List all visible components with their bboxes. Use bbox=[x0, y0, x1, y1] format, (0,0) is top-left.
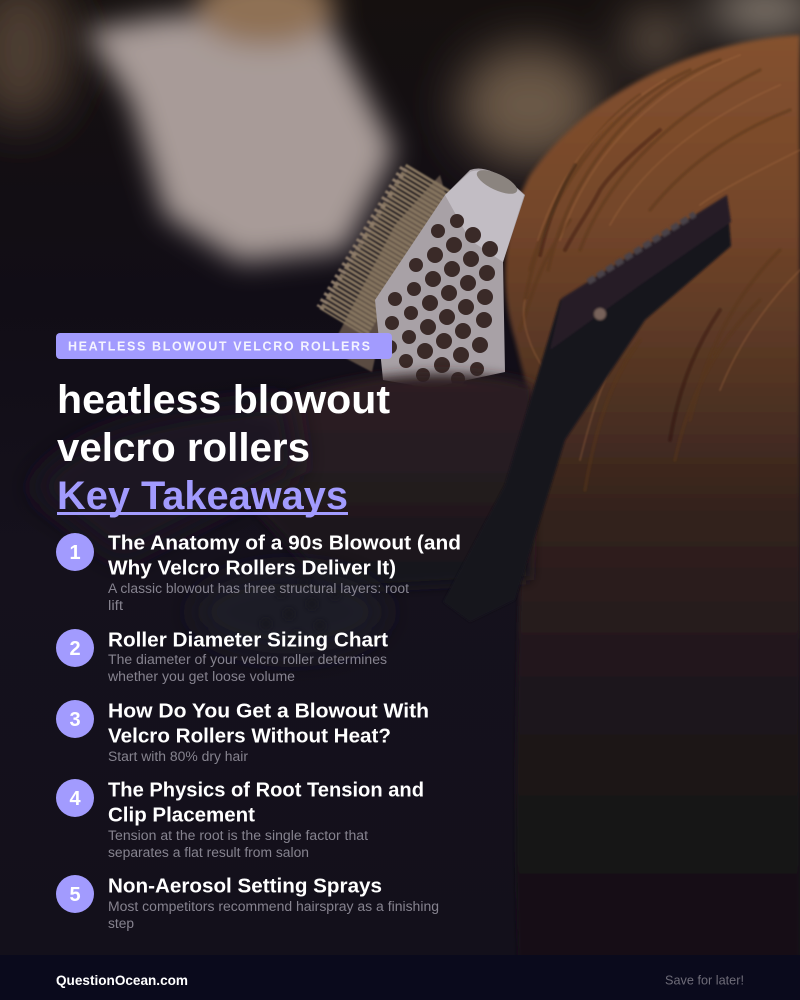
footer bar bbox=[0, 955, 800, 1000]
title: heatless blowout bbox=[57, 378, 390, 422]
takeaway 5 bbox=[56, 875, 439, 931]
takeaway 4: The Physics of Root Tension and bbox=[108, 780, 424, 802]
takeaway 1: A classic blowout has three structural layers: root bbox=[108, 581, 409, 596]
title: velcro rollers bbox=[57, 426, 310, 470]
title bbox=[57, 378, 390, 518]
black hair clip bbox=[443, 195, 731, 622]
takeaway 1: The Anatomy of a 90s Blowout (and bbox=[108, 532, 461, 554]
takeaway 3: Velcro Rollers Without Heat? bbox=[108, 726, 391, 748]
hair on the right bbox=[505, 35, 800, 1000]
tag pill: HEATLESS BLOWOUT VELCRO ROLLERS bbox=[68, 340, 370, 354]
takeaway 3: How Do You Get a Blowout With bbox=[108, 700, 429, 722]
takeaway 5: Most competitors recommend hairspray as a finishing bbox=[108, 899, 439, 914]
brush barrel with perforations bbox=[375, 165, 525, 388]
takeaway 4: 4 bbox=[69, 788, 81, 810]
footer bar: Save for later! bbox=[665, 974, 744, 988]
takeaway 1: Why Velcro Rollers Deliver It) bbox=[108, 558, 396, 580]
takeaway 4 bbox=[56, 779, 424, 860]
blurred white figure bbox=[85, 0, 395, 262]
takeaway 2: The diameter of your velcro roller determines bbox=[108, 652, 387, 667]
takeaway 5: Non-Aerosol Setting Sprays bbox=[108, 876, 382, 898]
takeaway 4: Clip Placement bbox=[108, 804, 255, 826]
title: Key Takeaways bbox=[57, 474, 348, 518]
takeaway 3 bbox=[56, 700, 429, 764]
takeaway 2: 2 bbox=[69, 638, 81, 660]
footer bar: QuestionOcean.com bbox=[56, 972, 188, 988]
takeaway 4: Tension at the root is the single factor that bbox=[108, 828, 368, 843]
takeaway 2: Roller Diameter Sizing Chart bbox=[108, 630, 388, 652]
takeaway 1: lift bbox=[108, 598, 123, 613]
faint lower brush bbox=[195, 570, 385, 654]
takeaway 2 bbox=[56, 629, 388, 684]
takeaway 5: 5 bbox=[69, 884, 81, 906]
brown hair band over the brush bbox=[30, 373, 535, 590]
brush bristles bbox=[320, 168, 447, 372]
takeaway 2: whether you get loose volume bbox=[107, 669, 295, 684]
takeaway 1 bbox=[56, 532, 461, 613]
takeaway 1: 1 bbox=[69, 542, 81, 564]
takeaway 3: 3 bbox=[69, 709, 81, 731]
takeaway 4: separates a flat result from salon bbox=[108, 845, 309, 860]
takeaway 5: step bbox=[108, 916, 134, 931]
tag pill bbox=[56, 333, 392, 359]
takeaway 3: Start with 80% dry hair bbox=[108, 749, 249, 764]
